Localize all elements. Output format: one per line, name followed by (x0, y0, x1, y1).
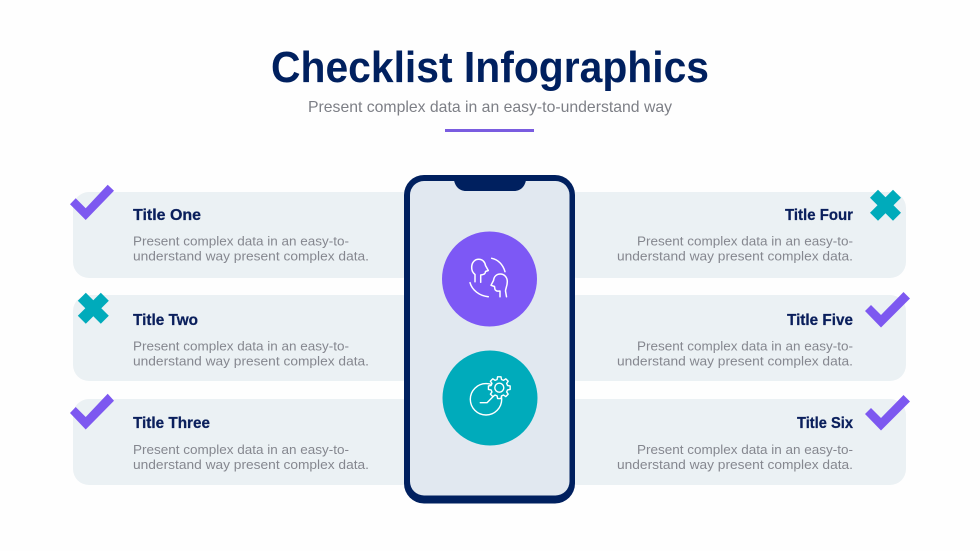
text block: title two: Present complex data in an easy-to- (133, 338, 349, 354)
icon: two heads (470, 258, 507, 297)
text block: title four: Present complex data in an easy-to- (637, 234, 853, 248)
heading: title one: Title One (133, 207, 201, 224)
text block: title two: understand way present complex data. (133, 354, 369, 368)
text block: title one: understand way present complex data. (133, 248, 369, 264)
text block: title five: Present complex data in an easy-to- (637, 338, 853, 354)
title: Checklist Infographics (271, 43, 709, 92)
text block: title three: understand way present complex data. (133, 457, 369, 472)
text block: title three: Present complex data in an easy-to- (133, 442, 349, 457)
text block: title five (617, 338, 853, 368)
circle: clock gear icon (442, 350, 538, 446)
text block: title five: understand way present complex data. (617, 354, 853, 368)
icon: clock with gear (470, 377, 510, 415)
phone notch (454, 180, 526, 191)
text block: title one (133, 234, 369, 264)
heading: title four: Title Four (785, 207, 853, 224)
icon: check title five (865, 292, 910, 328)
icon: cross title two (78, 293, 109, 324)
accent rule (445, 129, 534, 132)
heading: title six: Title Six (797, 415, 853, 432)
icon: check title one (70, 185, 114, 220)
heading: title three: Title Three (133, 415, 210, 432)
panel: title two (73, 295, 418, 381)
circle: people icon (442, 232, 537, 326)
text block: title one: Present complex data in an easy-to- (133, 234, 349, 248)
text block: title three (133, 442, 369, 472)
heading: title two: Title Two (133, 312, 198, 329)
text block: title two (133, 338, 369, 368)
text block: title six: Present complex data in an easy-to- (637, 442, 853, 457)
text block: title six: understand way present complex data. (617, 457, 853, 472)
heading: title five: Title Five (787, 312, 853, 329)
icon: check title three (70, 394, 114, 430)
icon: check title six (865, 395, 910, 430)
text block: title four (617, 234, 853, 264)
text block: title four: understand way present complex data. (617, 248, 853, 264)
panel: title six (561, 399, 906, 485)
panel: title one (73, 192, 418, 278)
phone screen (410, 181, 570, 496)
panel: title four (561, 192, 906, 278)
text block: title six (617, 442, 853, 472)
panel: title three (73, 399, 418, 485)
phone (404, 175, 575, 504)
subtitle: Present complex data in an easy-to-understand way (308, 99, 672, 116)
panel: title five (561, 295, 906, 381)
icon: cross title four (870, 190, 901, 221)
